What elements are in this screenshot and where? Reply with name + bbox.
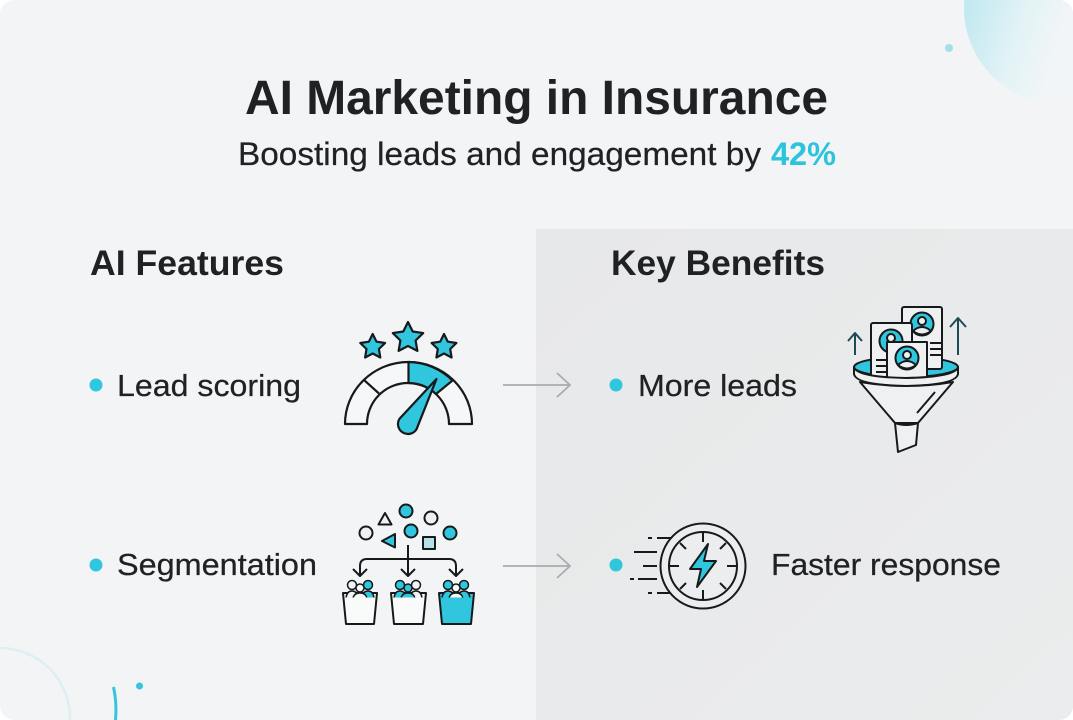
item: Faster response: Faster response <box>771 547 1001 582</box>
panel: key benefits background <box>536 229 1073 720</box>
arrow: lead scoring to more leads <box>503 373 570 397</box>
arrow: segmentation to faster response <box>503 554 570 578</box>
decorative dot bottom left <box>136 682 143 690</box>
icon: segmentation buckets <box>343 504 474 624</box>
decorative dot top right <box>945 44 953 52</box>
item: Segmentation: Segmentation <box>117 547 317 582</box>
icon: clock with lightning bolt <box>630 524 746 608</box>
subtitle: Boosting leads and engagement by <box>238 136 761 172</box>
title: AI Marketing in Insurance <box>245 72 828 125</box>
subtitle: 42% <box>771 136 836 172</box>
decorative arc bottom left <box>114 687 116 720</box>
decorative ring bottom left <box>0 648 70 720</box>
heading: Key Benefits: Key Benefits <box>611 244 825 283</box>
item: Faster response <box>610 547 1001 582</box>
item: Lead scoring: Lead scoring <box>117 368 301 403</box>
heading: AI Features: AI Features <box>90 244 284 283</box>
item: More leads: More leads <box>638 368 797 403</box>
icon: lead funnel <box>848 307 966 452</box>
icon: gauge with stars <box>345 322 472 434</box>
decorative circle top right <box>964 0 1054 96</box>
